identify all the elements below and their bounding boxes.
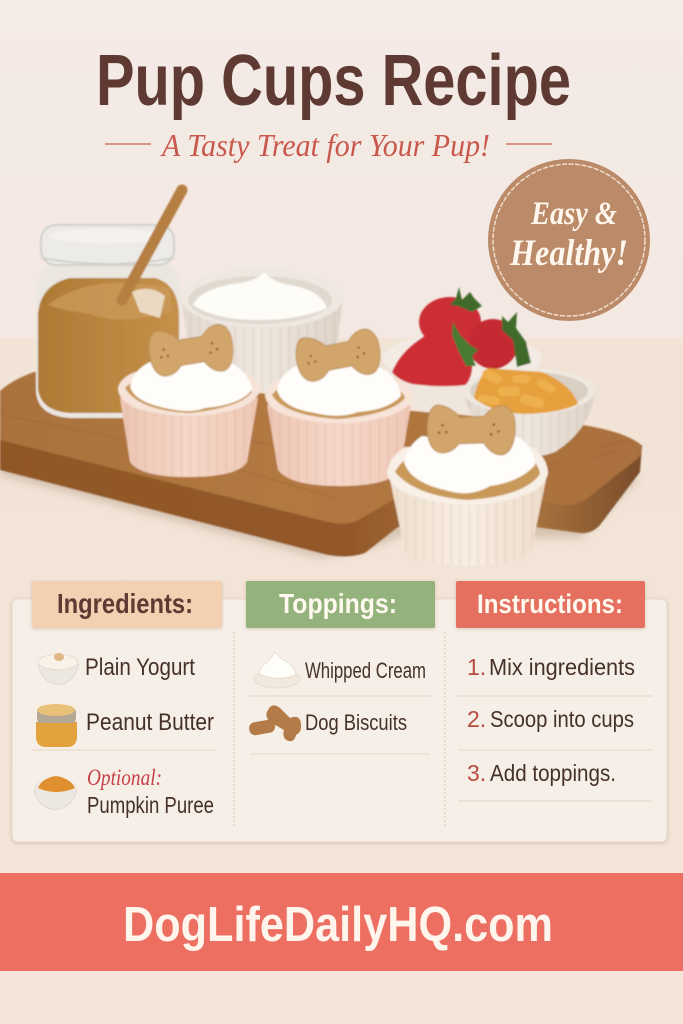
toppings header: Toppings:: [279, 588, 397, 619]
toppings header: [246, 581, 435, 628]
icon: pumpkin bowl: [34, 776, 77, 810]
column dividers: [234, 632, 445, 828]
instructions panel card: [12, 599, 667, 842]
badge: easy and healthy: [488, 159, 650, 321]
step 2: Scoop into cups: [490, 706, 634, 732]
orange treats bowl: [463, 368, 595, 456]
step 2: 2.: [467, 706, 486, 732]
table surface: [0, 338, 683, 1024]
wooden cutting board: [0, 372, 642, 556]
pup cup front: [387, 402, 548, 566]
instructions list: [458, 654, 652, 801]
dog biscuits label: Dog Biscuits: [305, 710, 407, 735]
ingredients header: Ingredients:: [57, 588, 193, 619]
footer banner: DogLifeDailyHQ.com: [123, 898, 553, 952]
pup cup left: [118, 324, 260, 477]
badge: easy and healthy: Healthy!: [509, 233, 628, 274]
ingredients list: [32, 653, 217, 818]
optional label: Optional:: [87, 765, 162, 790]
step 3: Add toppings.: [490, 760, 616, 786]
pumpkin puree label: Pumpkin Puree: [87, 792, 214, 818]
icon: dog biscuits: [248, 705, 301, 741]
title: Pup Cups Recipe: [96, 41, 571, 121]
footer banner: [0, 873, 683, 971]
pup cup centre: [265, 328, 413, 486]
subtitle: A Tasty Treat for Your Pup!: [160, 127, 490, 163]
badge: easy and healthy: Easy &: [530, 196, 617, 232]
icon: peanut butter jar: [36, 704, 77, 747]
instructions header: [456, 581, 645, 628]
yogurt bowl: [181, 268, 343, 392]
whipped cream label: Whipped Cream: [305, 658, 426, 683]
biscuit: [426, 402, 516, 457]
product photo: [0, 190, 642, 566]
step 1: Mix ingredients: [489, 654, 635, 680]
strawberry dish: [382, 287, 542, 412]
board shadow: [0, 460, 640, 558]
icon: yogurt bowl: [38, 653, 79, 685]
instructions header: Instructions:: [477, 589, 623, 619]
jar of peanut butter: [36, 190, 182, 418]
peanut butter label: Peanut Butter: [86, 709, 214, 736]
plain yogurt label: Plain Yogurt: [85, 654, 195, 681]
step 1: 1.: [467, 654, 486, 680]
ingredients header: [32, 581, 222, 628]
biscuit: [148, 324, 234, 377]
step 3: 3.: [467, 760, 486, 786]
toppings list: [248, 652, 430, 754]
icon: whipped cream: [254, 652, 300, 688]
background wall: [0, 0, 683, 338]
biscuit: [294, 328, 382, 383]
